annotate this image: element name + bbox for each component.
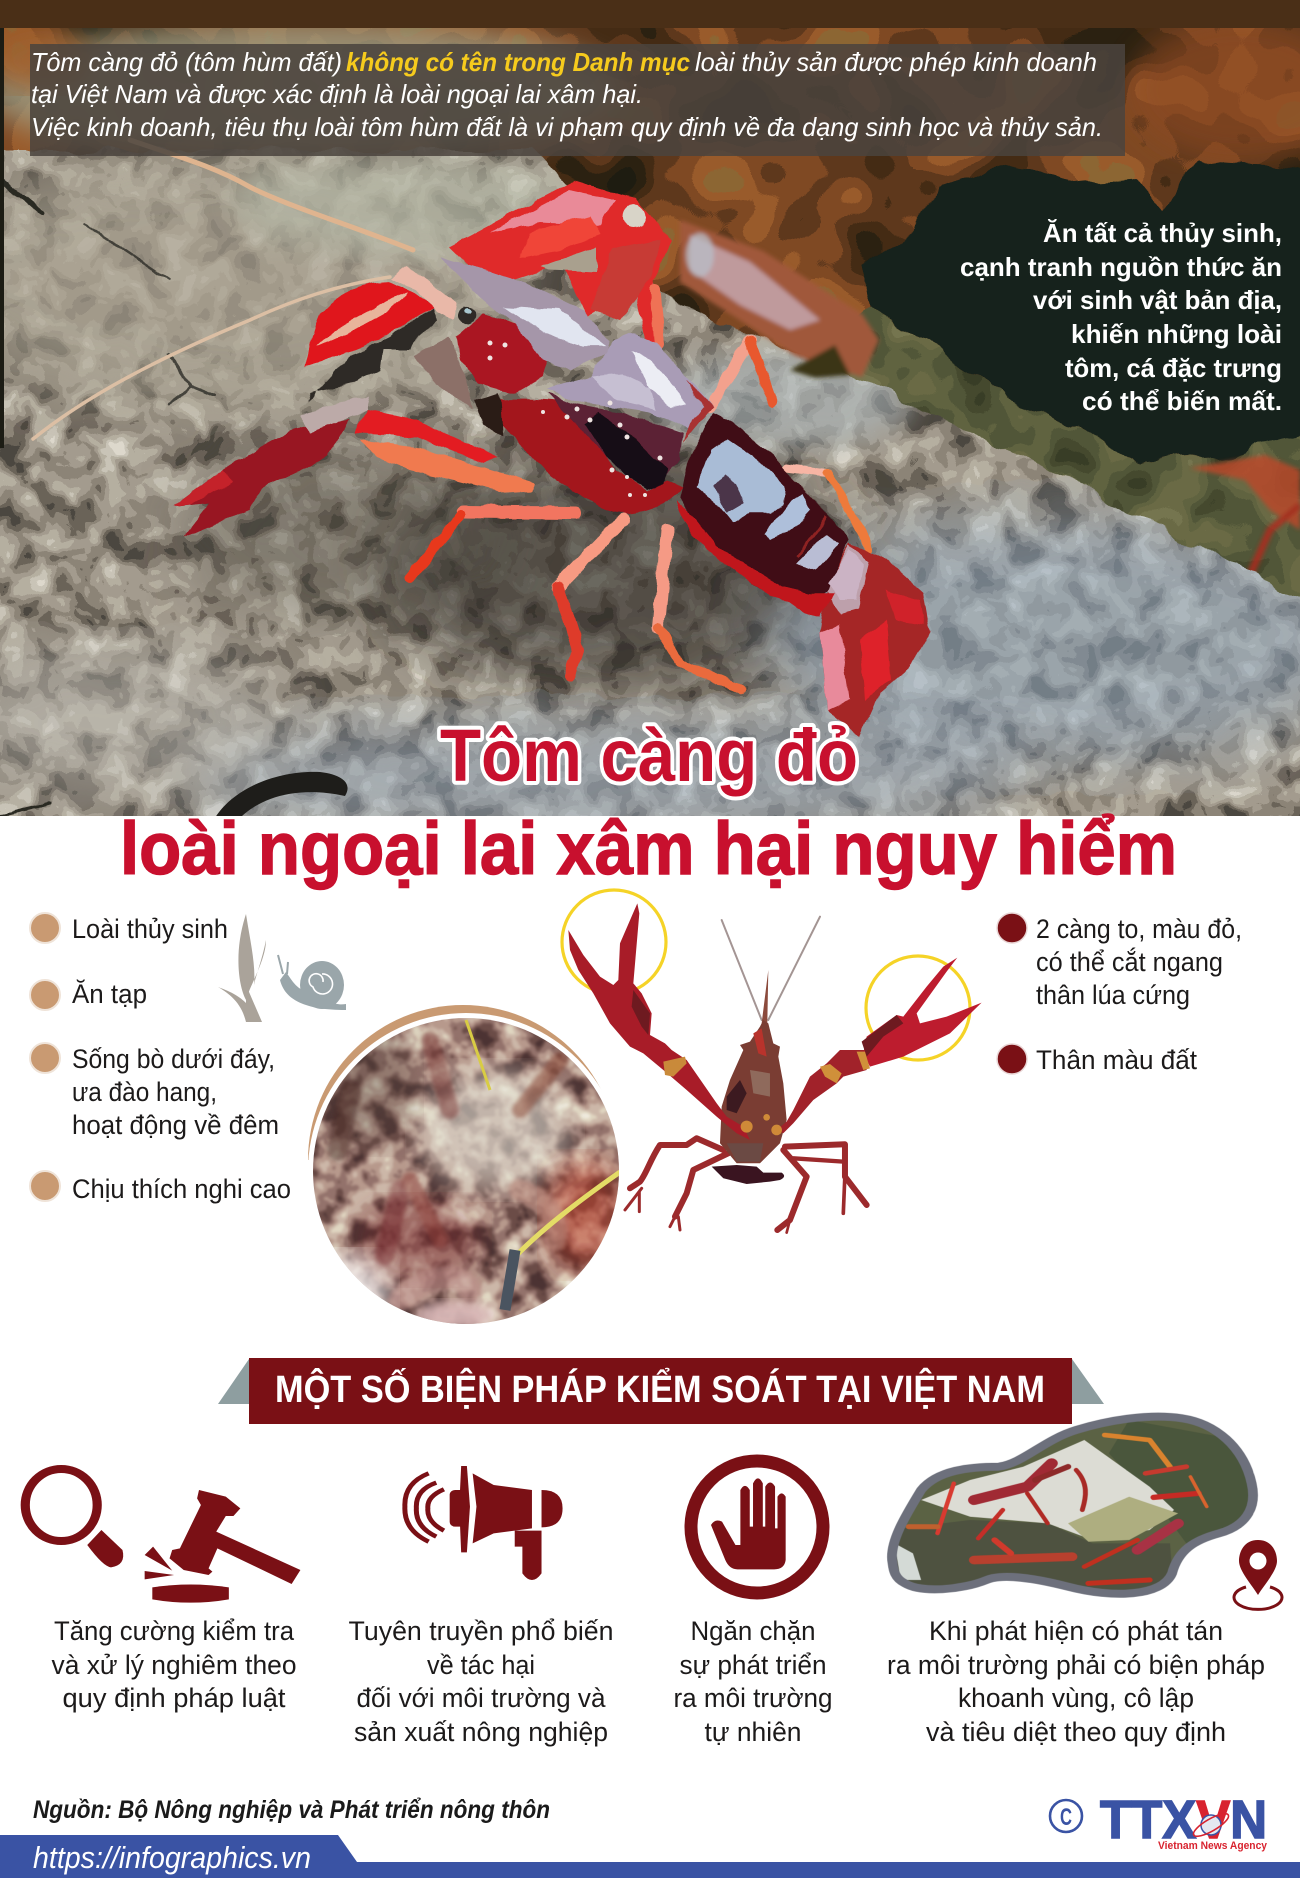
dark background area: [862, 162, 1300, 460]
left claw and arm: [568, 903, 750, 1140]
shadow under crayfish: [307, 307, 437, 403]
icon: megaphone: [405, 1466, 563, 1580]
title line 1: Tôm càng đỏ: [440, 714, 858, 797]
title line 2: loài ngoại lai xâm hại nguy hiểm: [120, 807, 1177, 890]
right text on dark area: Ăn tất cả thủy sinh,: [1043, 218, 1282, 248]
photo: crayfish crowd circle: [290, 1015, 625, 1335]
crayfish shapes in blob: [909, 1435, 1207, 1583]
right text on dark area: với sinh vật bản địa,: [1033, 285, 1282, 315]
tan arc behind photo: [308, 1005, 618, 1160]
logo: copyright: [1050, 1800, 1082, 1832]
rock cracks: [0, 178, 215, 815]
dark left edge of hero: [0, 28, 4, 448]
intro text block: không có tên trong Danh mục: [346, 47, 690, 77]
right text on dark area: [960, 218, 1282, 416]
left characteristics list: [30, 913, 291, 1204]
text box background: [30, 44, 1125, 156]
tail: [712, 1165, 784, 1184]
measure text: isolation: [887, 1616, 1265, 1747]
antennae: [722, 917, 820, 1020]
logo: TTXVN: Vietnam News Agency: [1158, 1840, 1268, 1852]
back claw: [449, 180, 671, 347]
shell speckles: [488, 340, 662, 497]
arm of lower claw: [353, 410, 537, 492]
tail fan: [820, 543, 930, 737]
section banner wings: [218, 1359, 1104, 1404]
back legs: [655, 290, 870, 550]
measure text: isolation: Khi phát hiện có phát tán: [929, 1616, 1223, 1646]
measure text: inspection: quy định pháp luật: [62, 1683, 286, 1713]
logo: TTXVN: TTXVN: [1100, 1790, 1267, 1850]
bullet: bottom dweller: Sống bò dưới đáy,: [72, 1044, 275, 1074]
mossy band: [846, 306, 1300, 596]
footer bar with url tab: https://infographics.vn: [33, 1840, 311, 1875]
source line: Nguồn: Bộ Nông nghiệp và Phát triển nông thôn: [33, 1796, 550, 1824]
intro text block: Tôm càng đỏ (tôm hùm đất): [31, 47, 342, 77]
measure text: inspection: Tăng cường kiểm tra: [54, 1616, 295, 1646]
bullet: claws: có thể cắt ngang: [1036, 946, 1223, 977]
bullet: claws: 2 càng to, màu đỏ,: [1036, 914, 1242, 944]
white ring: [308, 1013, 624, 1329]
body: [720, 1020, 787, 1163]
right claw and arm: [777, 1050, 867, 1133]
antennae: [33, 140, 413, 439]
bullet: bottom dweller: [30, 1043, 279, 1140]
icon: location pin: [1234, 1540, 1282, 1609]
bullet: omnivorous: Ăn tạp: [72, 979, 147, 1009]
top brown bar: [0, 0, 1300, 28]
icon: magnifier and gavel: [25, 1469, 300, 1603]
bullet: claws: [997, 913, 1242, 1010]
bullet: bottom dweller: hoạt động về đêm: [72, 1110, 279, 1140]
icon: stop hand: [691, 1461, 823, 1593]
dark rock hollow: [215, 772, 348, 818]
measure text: inspection: [52, 1616, 296, 1713]
walking legs: [625, 1138, 867, 1233]
crayfish: [173, 180, 930, 737]
photo blob: crayfish on rock: [880, 1410, 1260, 1603]
rostrum: [762, 970, 768, 1023]
crayfish bodies in crowd: [338, 1040, 560, 1300]
section banner: [249, 1358, 1072, 1424]
measure text: isolation: và tiêu diệt theo quy định: [926, 1717, 1226, 1747]
panel: hero illustration of red swamp crayfish on rock: [0, 28, 1300, 816]
measure text: propaganda: về tác hại: [427, 1650, 535, 1680]
measure text: prevention: ra môi trường: [674, 1683, 832, 1713]
intro text block: [31, 47, 1103, 142]
bullet: claws: thân lúa cứng: [1036, 980, 1190, 1010]
claw highlight circles: [562, 890, 970, 1060]
measure text: isolation: khoanh vùng, cô lập: [958, 1683, 1194, 1713]
right characteristics list: [997, 913, 1242, 1075]
right text on dark area: cạnh tranh nguồn thức ăn: [960, 252, 1282, 282]
bullet: aquatic species: Loài thủy sinh: [72, 914, 228, 944]
intro text block: Việc kinh doanh, tiêu thụ loài tôm hùm đất là vi phạm quy định về đa dạng sinh học và thủy sản.: [31, 112, 1103, 142]
head: [305, 257, 610, 437]
measure text: propaganda: sản xuất nông nghiệp: [354, 1717, 608, 1747]
background crayfish at right edge: [1190, 455, 1300, 575]
intro text block: loài thủy sản được phép kinh doanh: [695, 47, 1097, 77]
bullet: bottom dweller: ưa đào hang,: [72, 1077, 217, 1107]
right text on dark area: khiến những loài: [1071, 319, 1282, 349]
bullet: adaptable: Chịu thích nghi cao: [72, 1174, 291, 1204]
right text on dark area: tôm, cá đặc trưng: [1065, 353, 1282, 383]
bullet: omnivorous: [30, 979, 147, 1010]
measure text: propaganda: Tuyên truyền phổ biến: [348, 1616, 614, 1646]
measure text: prevention: sự phát triển: [680, 1650, 826, 1680]
measure text: prevention: [674, 1616, 832, 1747]
footer bar with url tab: [0, 1835, 1300, 1878]
rock surface: [0, 146, 1300, 816]
walking legs: [410, 512, 743, 690]
measure text: propaganda: [348, 1616, 614, 1747]
measure text: prevention: tự nhiên: [704, 1717, 802, 1747]
measure text: propaganda: đối với môi trường và: [356, 1683, 606, 1713]
bullet: body colour: Thân màu đất: [1036, 1045, 1197, 1075]
lower claw: [173, 395, 370, 537]
orange joints: [741, 1114, 782, 1135]
measure text: inspection: và xử lý nghiêm theo: [52, 1650, 296, 1680]
abdomen, body and head: [477, 333, 863, 617]
measure text: prevention: Ngăn chặn: [690, 1616, 816, 1646]
hero background: blurred brown foliage: [4, 28, 1300, 465]
measure text: isolation: ra môi trường phải có biện pháp: [887, 1650, 1265, 1680]
out-of-focus limb: [680, 220, 879, 378]
right text on dark area: có thể biến mất.: [1082, 386, 1282, 416]
icon: reed and snail: [218, 914, 346, 1022]
intro text block: tại Việt Nam và được xác định là loài ngoại lai xâm hại.: [31, 79, 643, 109]
logo: copyright: C: [1060, 1804, 1072, 1831]
illustration: crayfish top view: [568, 903, 982, 1233]
section banner: MỘT SỐ BIỆN PHÁP KIỂM SOÁT TẠI VIỆT NAM: [275, 1366, 1045, 1411]
